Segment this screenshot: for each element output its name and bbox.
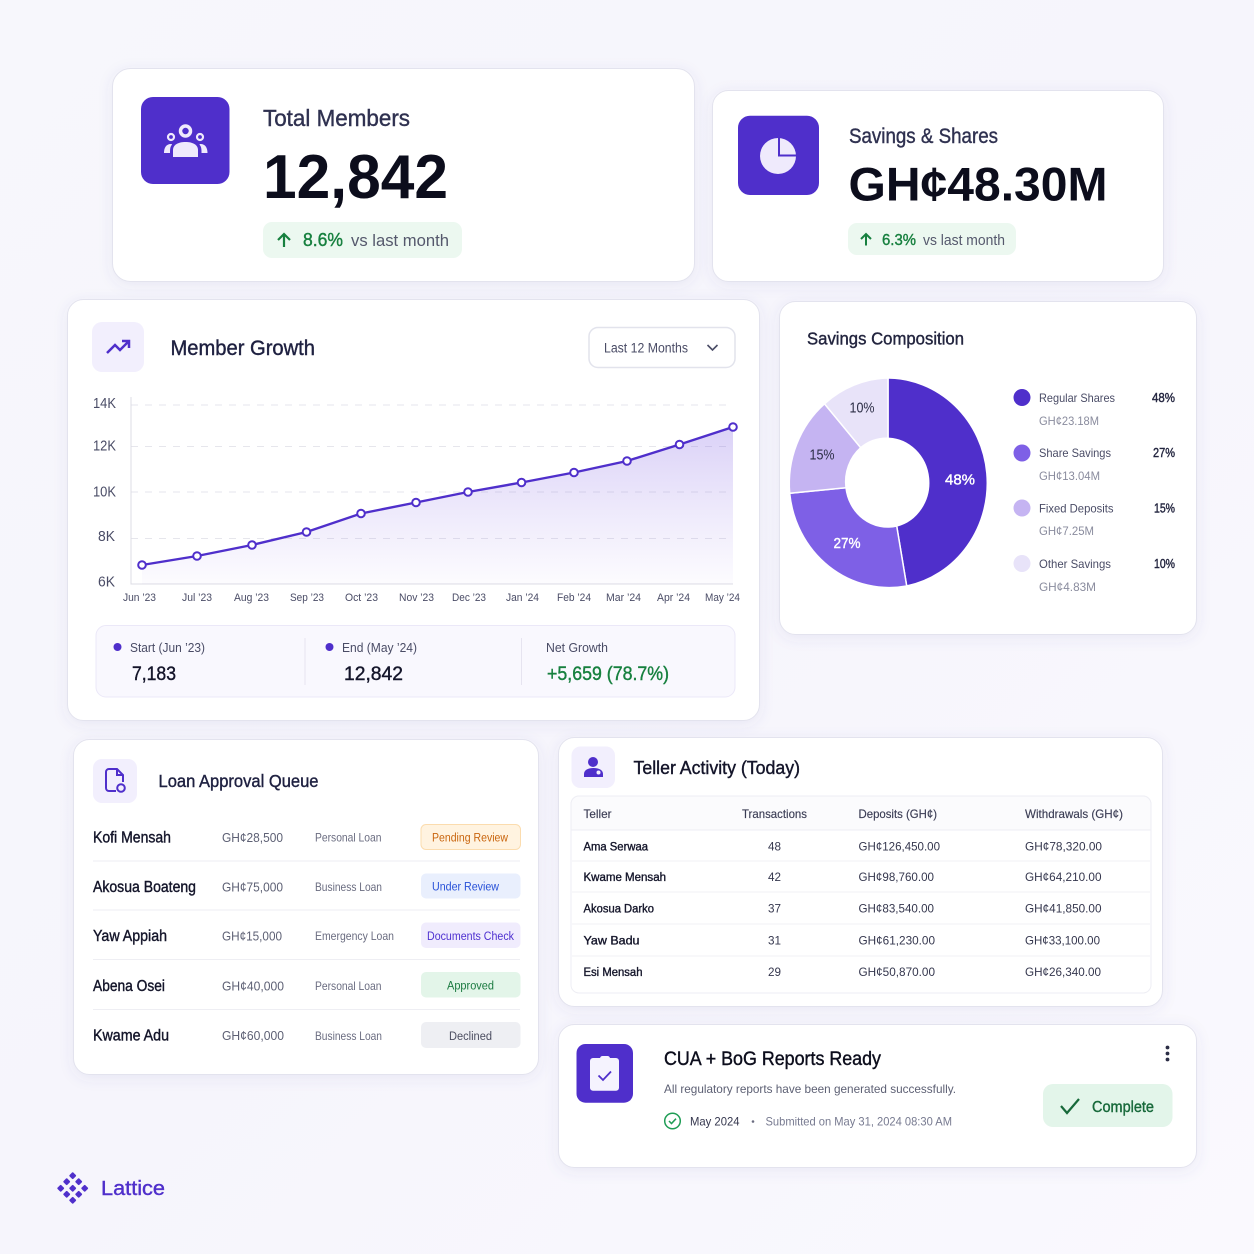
panel: reports ready (558, 1024, 1196, 1168)
table: teller activity: GH¢126,450.00 (858, 840, 940, 854)
summary strip: growth totals: Net Growth (546, 640, 608, 655)
row: Kofi Mensah (93, 824, 520, 850)
summary strip: growth totals: End (May ’24) (342, 640, 417, 655)
line chart: member growth: Dec ’23 (452, 592, 486, 604)
row: Kwame Adu: Business Loan (315, 1029, 382, 1043)
legend: savings types: Fixed Deposits (1039, 502, 1114, 516)
table: teller activity: Esi Mensah (584, 967, 642, 979)
panel: member growth (68, 300, 760, 720)
table: teller activity (571, 796, 1151, 993)
table: teller activity: Teller (584, 807, 612, 821)
legend: savings types (1014, 389, 1175, 594)
table: teller activity: GH¢78,320.00 (1025, 840, 1102, 854)
table: teller activity: 31 (768, 934, 781, 948)
icon: more menu (1166, 1046, 1169, 1061)
row: Kwame Adu: Declined (449, 1031, 492, 1043)
table: teller activity: GH¢50,870.00 (858, 965, 935, 979)
summary strip: growth totals (96, 626, 735, 697)
legend: savings types: 10% (1154, 557, 1175, 571)
row: Yaw Appiah: Emergency Loan (315, 929, 394, 943)
badge: members change (263, 222, 462, 258)
row: Abena Osei: Abena Osei (93, 978, 165, 995)
row: Kofi Mensah: Personal Loan (315, 830, 382, 844)
summary strip: growth totals: 7,183 (132, 663, 176, 685)
panel: teller activity (558, 738, 1162, 1006)
line chart: member growth: Jul ’23 (182, 592, 212, 604)
line chart: member growth: 14K (93, 396, 116, 412)
badge: savings change: 6.3% (882, 232, 916, 249)
row: Akosua Boateng: Under Review (432, 882, 500, 894)
donut chart (789, 378, 987, 588)
row: Kofi Mensah: Pending Review (432, 832, 509, 844)
summary strip: growth totals: 12,842 (344, 663, 403, 685)
dropdown: date range (589, 328, 735, 368)
row: Kwame Adu: Kwame Adu (93, 1028, 169, 1044)
heading: savings composition: Savings Composition (807, 328, 964, 348)
heading: loan approval queue: Loan Approval Queue (158, 771, 318, 791)
icon: teller (572, 746, 615, 788)
table: teller activity: Deposits (GH¢) (858, 807, 937, 821)
row: Yaw Appiah: GH¢15,000 (222, 928, 282, 944)
row: Kofi Mensah: GH¢28,500 (222, 830, 283, 845)
legend: savings types: Regular Shares (1039, 391, 1115, 405)
logo: Lattice: Lattice (101, 1177, 165, 1200)
row: Yaw Appiah: Yaw Appiah (93, 928, 167, 945)
donut chart: 10% (850, 400, 874, 416)
summary strip: growth totals: Start (Jun ’23) (130, 640, 205, 655)
dropdown: date range: Last 12 Months (604, 340, 688, 356)
legend: savings types: 48% (1152, 391, 1175, 405)
line chart: member growth: Oct ’23 (345, 592, 378, 604)
legend: savings types: GH¢13.04M (1039, 469, 1100, 483)
icon: lattice diamond (57, 1172, 89, 1204)
table: teller activity: GH¢41,850.00 (1025, 902, 1102, 916)
table: teller activity: Yaw Badu (584, 936, 640, 948)
legend: savings types: 27% (1153, 446, 1175, 460)
icon: document (93, 759, 137, 803)
line chart: member growth: 6K (98, 574, 115, 590)
line chart: member growth: 8K (98, 529, 115, 545)
status line: submission (665, 1113, 952, 1129)
legend: savings types: 15% (1154, 502, 1175, 516)
table: teller activity: 29 (768, 965, 781, 979)
row: Akosua Boateng: Akosua Boateng (93, 879, 196, 896)
badge: members change: 8.6% (303, 230, 343, 250)
row: Abena Osei: GH¢40,000 (222, 978, 284, 994)
panel: total members (112, 68, 694, 282)
donut chart: 15% (810, 446, 834, 464)
legend: savings types: Share Savings (1039, 446, 1111, 460)
row: Kwame Adu: GH¢60,000 (222, 1028, 284, 1043)
line chart: member growth: Jun ’23 (123, 592, 156, 604)
heading: reports ready: CUA + BoG Reports Ready (664, 1048, 881, 1070)
row: Akosua Boateng: GH¢75,000 (222, 880, 283, 894)
line chart: member growth: Jan ’24 (506, 592, 539, 604)
table: teller activity: GH¢61,230.00 (858, 934, 935, 948)
button: complete (1043, 1084, 1172, 1127)
row: Akosua Boateng: Business Loan (315, 880, 382, 894)
status line: submission: May 2024 (690, 1114, 740, 1128)
badge: savings change: vs last month (923, 232, 1005, 249)
legend: savings types: GH¢4.83M (1039, 580, 1096, 594)
line chart: member growth: Sep ’23 (290, 592, 324, 604)
line chart: member growth: 10K (93, 484, 116, 500)
heading: member growth: Member Growth (170, 337, 315, 360)
row: Abena Osei (93, 972, 520, 998)
table: teller activity: 48 (768, 840, 781, 854)
status line: submission: Submitted on May 31, 2024 08:30 AM (766, 1114, 952, 1128)
row: Yaw Appiah (93, 922, 520, 948)
table: teller activity: GH¢64,210.00 (1025, 870, 1102, 884)
table: teller activity: 42 (768, 870, 781, 884)
line chart: member growth: Mar ’24 (606, 592, 641, 604)
icon: members (141, 97, 230, 184)
table: teller activity: 37 (768, 902, 781, 916)
table: teller activity: Kwame Mensah (584, 872, 666, 884)
heading: savings and shares: Savings & Shares (849, 125, 998, 148)
line chart: member growth (93, 396, 740, 604)
panel: loan approval queue (74, 740, 538, 1074)
line chart: member growth: Feb ’24 (557, 592, 591, 604)
panel: savings composition (780, 302, 1196, 634)
line chart: member growth: May ’24 (705, 592, 740, 604)
heading: total members: Total Members (263, 105, 410, 131)
row: Abena Osei: Personal Loan (315, 979, 382, 993)
button: complete: Complete (1092, 1099, 1154, 1116)
table: teller activity: GH¢83,540.00 (858, 902, 934, 916)
table: teller activity: Akosua Darko (584, 904, 654, 916)
badge: members change: vs last month (351, 231, 449, 250)
table: teller activity: Ama Serwaa (584, 842, 649, 854)
table: teller activity: Withdrawals (GH¢) (1025, 807, 1123, 821)
line chart: member growth: 12K (93, 438, 116, 454)
row: Akosua Boateng (93, 874, 520, 898)
donut chart: 27% (834, 535, 860, 552)
icon: clipboard (576, 1044, 633, 1103)
legend: savings types: GH¢23.18M (1039, 414, 1099, 428)
badge: savings change (848, 223, 1016, 255)
text: reports description: All regulatory reports have been generated successfully. (664, 1082, 956, 1096)
icon: pie chart (738, 116, 819, 195)
line chart: member growth: Aug ’23 (234, 592, 269, 604)
table: teller activity: Transactions (742, 807, 807, 821)
row: Kofi Mensah: Kofi Mensah (93, 830, 171, 846)
row: Yaw Appiah: Documents Check (427, 931, 514, 943)
row: Abena Osei: Approved (447, 980, 494, 992)
line chart: member growth: Apr ’24 (657, 592, 690, 604)
donut chart: 48% (945, 472, 975, 488)
value: savings and shares: GH¢48.30M (848, 158, 1108, 210)
table: teller activity: GH¢98,760.00 (858, 870, 934, 884)
legend: savings types: GH¢7.25M (1039, 524, 1094, 538)
table: teller activity: GH¢33,100.00 (1025, 934, 1100, 948)
value: total members: 12,842 (263, 143, 448, 212)
line chart: member growth: Nov ’23 (399, 592, 434, 604)
panel: savings and shares (712, 90, 1164, 282)
heading: teller activity: Teller Activity (Today) (634, 757, 800, 778)
row: Kwame Adu (93, 1022, 520, 1048)
icon: trend arrow (92, 322, 144, 372)
table: teller activity: GH¢26,340.00 (1025, 965, 1101, 979)
logo: Lattice (57, 1172, 165, 1204)
legend: savings types: Other Savings (1039, 557, 1111, 571)
summary strip: growth totals: +5,659 (78.7%) (547, 663, 669, 685)
